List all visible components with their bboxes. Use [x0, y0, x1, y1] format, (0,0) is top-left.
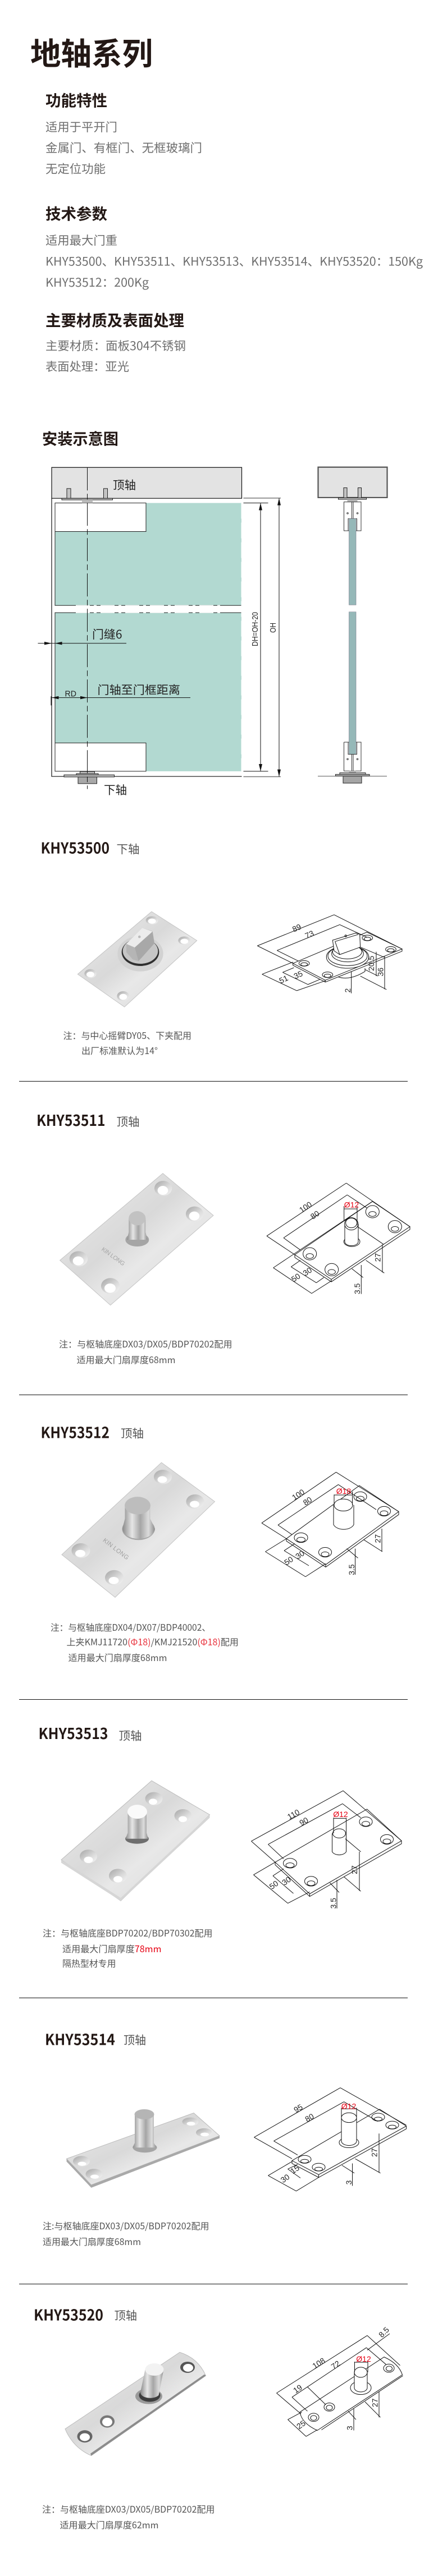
note — [43, 2219, 209, 2248]
dimension labels: 50 — [268, 1879, 280, 1891]
dimension drawing — [254, 2088, 407, 2191]
label: DH: DH=OH-20 — [250, 612, 260, 646]
note: 上夹KMJ11720(Φ18)/KMJ21520(Φ18)配用 — [66, 1635, 239, 1648]
note: 注：与枢轴底座DX03/DX05/BDP70202配用 — [42, 2502, 215, 2515]
front view — [38, 467, 281, 789]
product photo — [65, 2352, 206, 2455]
note — [43, 1926, 212, 1970]
label: bottom pivot: 下轴 — [104, 781, 127, 798]
dimension labels — [290, 1199, 382, 1294]
dimension labels: 2 — [343, 988, 352, 993]
text block: materials — [45, 337, 186, 375]
dimension labels: 50 — [282, 1554, 295, 1567]
dimension labels: 19 — [291, 2382, 304, 2395]
dimension drawing — [276, 2325, 403, 2436]
dimension labels: 100 — [298, 1199, 313, 1215]
top bracket — [344, 502, 361, 531]
panel: KHY53520 — [34, 2303, 403, 2531]
note: 适用最大门扇厚度68mm — [43, 2234, 141, 2248]
dimension: DH — [244, 498, 281, 777]
label: OH: OH — [268, 623, 278, 633]
dimension labels: 30 — [279, 2172, 291, 2184]
note: 适用最大门扇厚度78mm — [62, 1942, 162, 1955]
centre line — [86, 467, 88, 789]
dimension labels — [291, 2325, 391, 2431]
glass door upper — [55, 503, 241, 605]
glass door lower — [55, 613, 241, 771]
panel: KHY53511 — [36, 1108, 410, 1366]
panel: KHY53500 — [40, 836, 402, 1057]
dimension labels: 108 — [311, 2356, 327, 2371]
note: 注：与枢轴底座BDP70202/BDP70302配用 — [43, 1926, 212, 1939]
panel: features — [45, 88, 202, 177]
model heading: KHY53520 — [34, 2303, 103, 2325]
model type: 顶轴 — [119, 1727, 142, 1744]
text block: materials: 主要材质：面板304不锈钢 — [45, 337, 186, 354]
dimension labels: Ø18 — [336, 1487, 351, 1496]
note — [51, 1620, 239, 1664]
label: door gap: 门缝6 — [92, 625, 122, 642]
dimension labels — [279, 2101, 379, 2184]
heading: materials: 主要材质及表面处理 — [45, 308, 184, 330]
note: 注:与枢轴底座DX03/DX05/BDP70202配用 — [43, 2219, 209, 2232]
dimension labels: 30 — [280, 1875, 293, 1887]
panel: KHY53512 — [40, 1421, 399, 1664]
note — [42, 2502, 215, 2531]
text block: features — [45, 118, 202, 177]
side view — [318, 467, 387, 783]
panel: materials and finish — [45, 308, 186, 375]
dimension labels: 89 — [291, 922, 303, 933]
dimension labels — [282, 1487, 382, 1575]
text block: parameters: KHY53500、KHY53511、KHY53513、KHY53514、KHY53520：150Kg — [45, 252, 423, 269]
dimension labels: 3 — [344, 2180, 353, 2184]
title: 地轴系列 — [30, 29, 153, 74]
bottom bracket — [344, 742, 361, 771]
dimension drawing — [267, 1183, 410, 1294]
product photo — [60, 1174, 213, 1305]
model type: 顶轴 — [124, 2031, 146, 2048]
note: 注：与枢轴底座DX03/DX05/BDP70202配用 — [59, 1337, 232, 1350]
note: 出厂标准默认为14° — [81, 1043, 158, 1057]
dimension labels: Ø12 — [333, 1810, 348, 1819]
dimension labels: 3.5 — [328, 1898, 338, 1908]
product photo — [62, 1462, 215, 1597]
dimension labels: 72 — [330, 2358, 342, 2371]
dimension labels: Ø12 — [356, 2354, 371, 2363]
dimension labels: 3 — [345, 2426, 354, 2430]
dimension labels: 100 — [290, 1487, 306, 1502]
model type: 顶轴 — [121, 1424, 144, 1441]
model heading: KHY53512 — [40, 1421, 110, 1443]
model heading: KHY53513 — [38, 1722, 108, 1744]
dimension labels: 51 — [278, 973, 290, 985]
dimension labels: 3.5 — [353, 1283, 362, 1294]
text block: parameters: KHY53512：200Kg — [45, 273, 149, 291]
text block: features: 金属门、有框门、无框玻璃门 — [45, 139, 202, 156]
dimension: OH — [277, 498, 281, 777]
dimension labels: Ø12 — [341, 2101, 356, 2110]
text block: features: 无定位功能 — [45, 159, 106, 177]
model type: 下轴 — [117, 840, 139, 857]
note — [59, 1337, 232, 1366]
product photo: KIN LONG — [102, 1537, 130, 1561]
note: 适用最大门扇厚度62mm — [60, 2518, 158, 2531]
heading: parameters: 技术参数 — [45, 201, 107, 224]
dimension labels: 27 — [369, 2148, 379, 2157]
product photo — [66, 2109, 220, 2188]
model heading: KHY53500 — [40, 836, 110, 858]
dimension drawing — [262, 1472, 399, 1577]
dimension labels: 27 — [373, 1534, 382, 1543]
note — [63, 1028, 191, 1057]
label: pivot to frame: 门轴至门框距离 — [98, 680, 180, 697]
dimension labels: 20.5 — [367, 955, 376, 971]
top pivot — [62, 489, 112, 503]
heading: features: 功能特性 — [45, 88, 107, 111]
product photo — [77, 912, 197, 1007]
dimension labels: 30 — [294, 1548, 306, 1561]
note: 注：与枢轴底座DX04/DX07/BDP40002、 — [51, 1620, 211, 1634]
bottom pivot — [64, 771, 115, 784]
dimension labels: 35 — [293, 969, 304, 981]
label: top pivot: 顶轴 — [113, 476, 136, 493]
panel: technical parameters — [45, 201, 423, 291]
top cutout — [55, 503, 146, 532]
dimension labels: 50 — [290, 1271, 302, 1284]
note: 注：与中心摇臂DY05、下夹配用 — [63, 1028, 191, 1042]
panel: KHY53514 — [43, 2028, 407, 2248]
dimension labels: 80 — [303, 2112, 316, 2124]
dimension drawing — [257, 915, 402, 993]
arrow: RD — [51, 696, 190, 705]
panel: KHY53513 — [38, 1722, 402, 1970]
dimension labels: Ø12 — [344, 1200, 359, 1209]
text block: parameters: 适用最大门重 — [45, 231, 117, 249]
panel: installation diagram — [38, 467, 387, 798]
model type: 顶轴 — [117, 1112, 139, 1129]
text block: parameters — [45, 231, 423, 291]
dimension labels: 27 — [373, 1253, 382, 1262]
model heading: KHY53511 — [36, 1108, 106, 1130]
dimension labels: 25 — [295, 2418, 307, 2431]
dimension labels: 27 — [370, 2398, 380, 2407]
bottom cutout — [55, 743, 146, 771]
dimension labels: 15 — [289, 2163, 301, 2175]
dimension drawing — [252, 1791, 402, 1908]
label: RD: RD — [65, 689, 76, 699]
dimension labels: 30 — [301, 1266, 313, 1278]
arrow: door gap — [38, 642, 126, 645]
note: 适用最大门扇厚度68mm — [69, 1650, 167, 1664]
product photo: KIN LONG — [100, 1246, 126, 1267]
bottom side pivot — [336, 771, 369, 783]
product photo — [61, 1781, 210, 1901]
heading: installation diagram: 安装示意图 — [42, 426, 118, 449]
dimension labels — [278, 922, 385, 993]
note: 适用最大门扇厚度68mm — [76, 1353, 175, 1366]
note: 隔热型材专用 — [62, 1956, 116, 1970]
dimension labels: 36 — [376, 968, 385, 976]
dimension labels: 3.5 — [347, 1564, 356, 1575]
dimension labels: 90 — [298, 1815, 310, 1828]
dimension labels: 73 — [304, 928, 316, 940]
dimension labels: 8.5 — [377, 2325, 391, 2339]
side glass — [349, 519, 356, 755]
text block: materials: 表面处理：亚光 — [45, 357, 129, 375]
dimension labels: 27 — [350, 1865, 359, 1874]
model type: 顶轴 — [115, 2306, 137, 2323]
dimension labels: 110 — [286, 1807, 301, 1821]
dimension labels: 95 — [292, 2102, 304, 2114]
model heading: KHY53514 — [45, 2028, 115, 2050]
text block: features: 适用于平开门 — [45, 118, 117, 135]
dimension labels — [268, 1807, 359, 1908]
dimension labels: 80 — [302, 1495, 314, 1507]
dimension labels: 80 — [309, 1209, 321, 1221]
